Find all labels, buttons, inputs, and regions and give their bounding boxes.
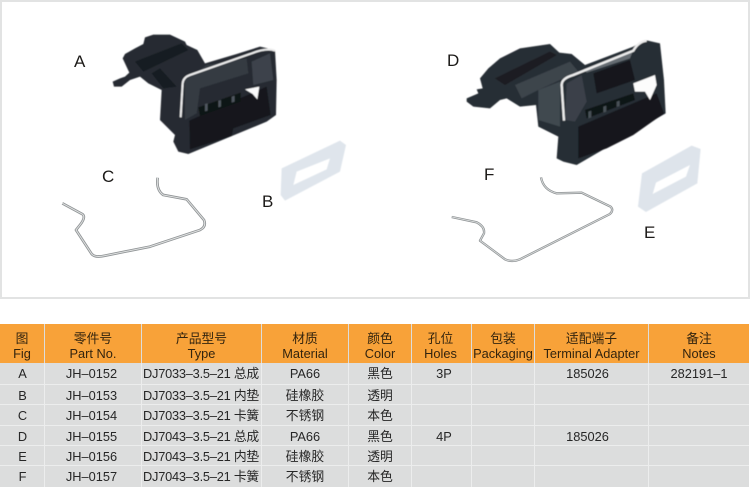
row E [0, 445, 749, 466]
row D: JH–0155 [66, 429, 117, 444]
row D [0, 425, 749, 446]
label D: D [447, 51, 459, 70]
table header: Holes [424, 346, 457, 361]
row A: JH–0152 [66, 366, 117, 381]
table header: 颜色 [367, 331, 393, 346]
table header: Color [365, 346, 395, 361]
row E: E [18, 449, 27, 464]
label E: E [644, 223, 655, 242]
row B [0, 384, 749, 405]
table header [0, 324, 749, 363]
row A: 282191–1 [671, 366, 727, 381]
row B: 硅橡胶 [286, 388, 324, 403]
row D: PA66 [290, 429, 320, 444]
row A: 黑色 [367, 366, 393, 381]
row A: A [18, 366, 27, 381]
gasket B [281, 141, 346, 201]
label F: F [484, 165, 494, 184]
row F: F [19, 469, 26, 484]
row C: C [18, 408, 27, 423]
row C [0, 404, 749, 425]
connector A [113, 35, 277, 154]
row A: 185026 [566, 366, 609, 381]
row D: 4P [436, 429, 452, 444]
label A: A [74, 52, 85, 71]
row D: 黑色 [367, 429, 393, 444]
row F [0, 465, 749, 487]
clip C [62, 178, 205, 257]
table header: Terminal Adapter [543, 346, 640, 361]
label B: B [262, 192, 273, 211]
row E: 硅橡胶 [286, 449, 324, 464]
table header: Part No. [70, 346, 116, 361]
clip F [452, 177, 612, 261]
table header: 包装 [490, 331, 516, 346]
row D: 185026 [566, 429, 609, 444]
row A: PA66 [290, 366, 320, 381]
row C: JH–0154 [66, 408, 117, 423]
row A [18, 366, 727, 381]
gasket E [638, 146, 701, 212]
row D: DJ7043–3.5–21 总成 [143, 429, 259, 444]
row E: DJ7043–3.5–21 内垫 [143, 449, 259, 464]
row B: B [18, 388, 27, 403]
table header: 孔位 [428, 331, 453, 346]
table header: 产品型号 [176, 331, 227, 346]
row E: JH–0156 [66, 449, 117, 464]
product illustrations [62, 34, 701, 262]
row B: 透明 [367, 388, 393, 403]
row B: JH–0153 [66, 388, 117, 403]
row E: 透明 [367, 449, 393, 464]
row F: DJ7043–3.5–21 卡簧 [143, 469, 259, 484]
table header: 材质 [292, 331, 318, 346]
table header: 零件号 [74, 331, 112, 346]
connector D [467, 40, 666, 165]
image panel [0, 0, 750, 299]
table header: 适配端子 [566, 331, 617, 346]
table header: 图 [16, 331, 28, 346]
table header: Packaging [473, 346, 533, 361]
row D: D [18, 429, 27, 444]
table header: Type [188, 346, 215, 361]
row F: 不锈钢 [286, 469, 324, 484]
specification table [0, 324, 749, 487]
table header: Fig [13, 346, 31, 361]
row C: DJ7033–3.5–21 卡簧 [143, 408, 259, 423]
row C: 本色 [367, 408, 393, 423]
row B: DJ7033–3.5–21 内垫 [143, 388, 259, 403]
label C: C [102, 167, 114, 186]
row F: JH–0157 [66, 469, 117, 484]
row C: 不锈钢 [286, 408, 324, 423]
table header: Notes [682, 346, 716, 361]
row A: 3P [436, 366, 452, 381]
row A: DJ7033–3.5–21 总成 [143, 366, 259, 381]
table header: Material [282, 346, 328, 361]
table header: 备注 [686, 331, 712, 346]
row F: 本色 [367, 469, 393, 484]
